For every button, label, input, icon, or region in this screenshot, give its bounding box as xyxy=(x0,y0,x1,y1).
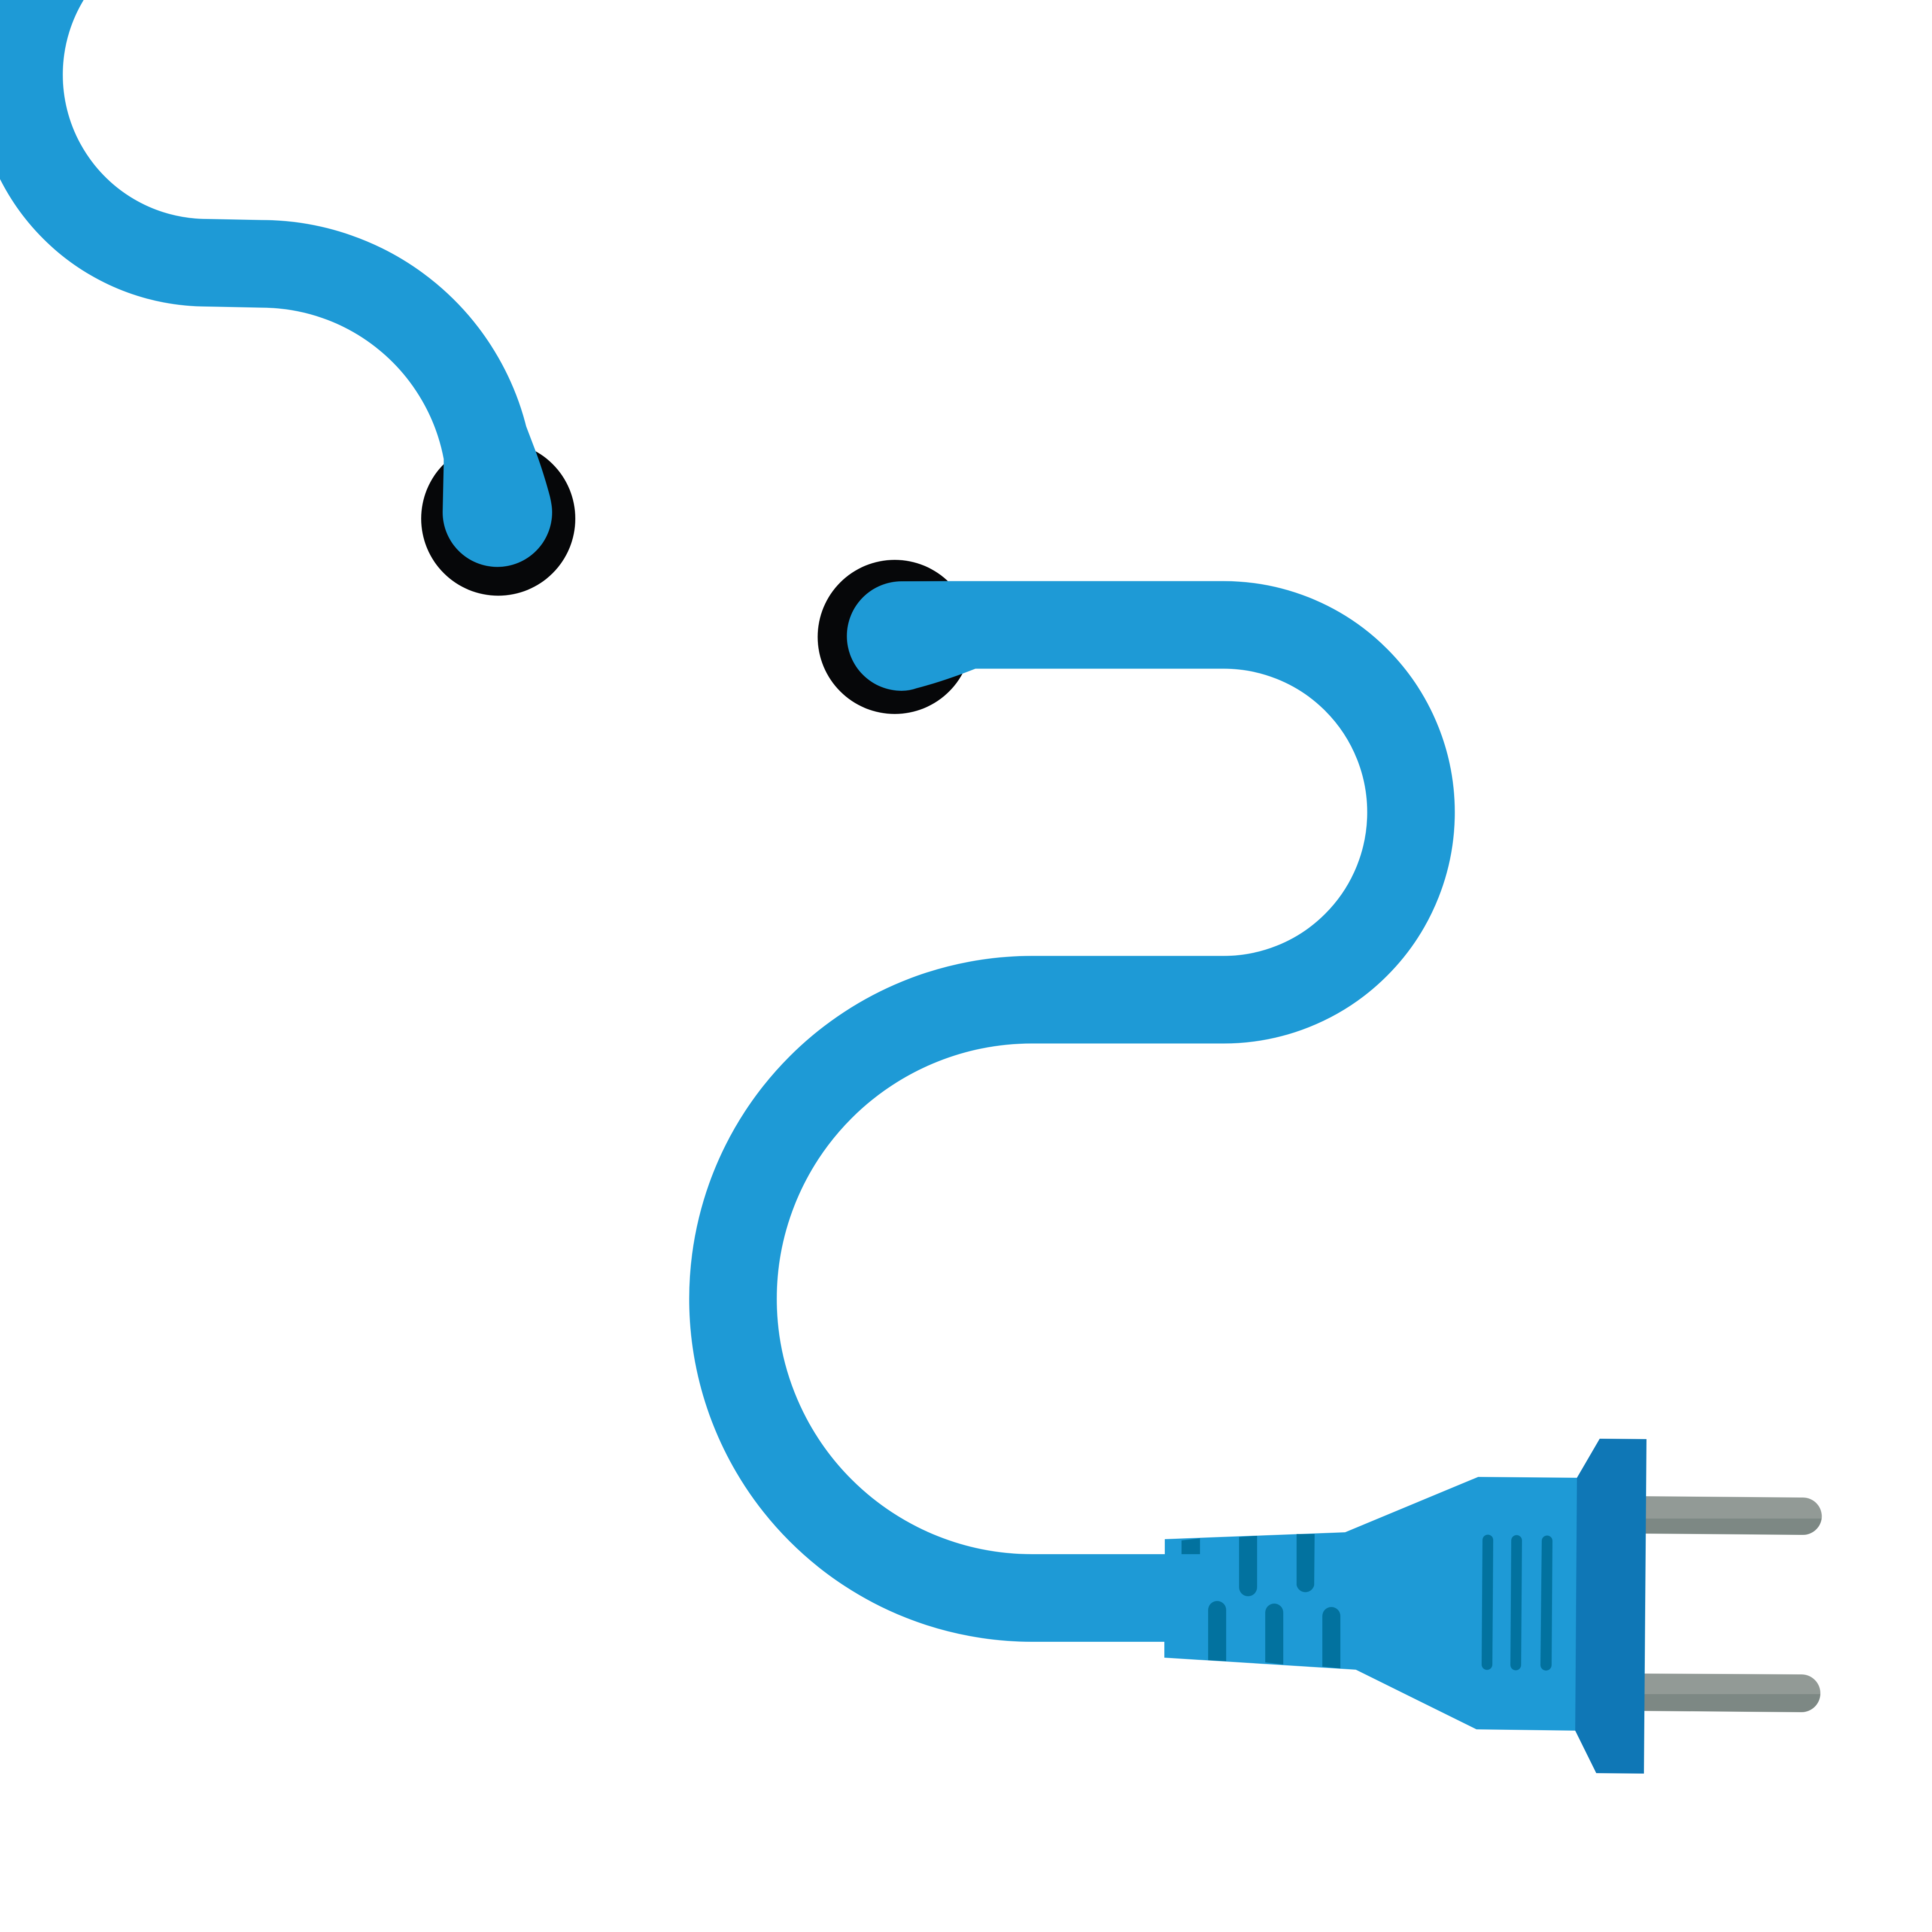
upper cable rounded tip xyxy=(443,420,552,567)
lower cable segment with socket end xyxy=(733,560,1411,1598)
upper cable segment with socket end xyxy=(19,0,575,596)
vents on plug body xyxy=(1482,1534,1552,1671)
plug front plate xyxy=(1575,1439,1646,1774)
plug body xyxy=(1159,1477,1578,1731)
bottom metal pin xyxy=(1640,1674,1820,1712)
icon: black socket circle, lower xyxy=(817,560,972,714)
lower cable body xyxy=(733,625,1411,1598)
lower cable rounded tip xyxy=(847,581,996,691)
plug xyxy=(1159,1439,1822,1774)
icon: black socket circle, upper xyxy=(421,441,575,596)
grip slots xyxy=(1182,1534,1340,1668)
upper cable body xyxy=(19,0,487,452)
top metal pin xyxy=(1642,1496,1822,1535)
